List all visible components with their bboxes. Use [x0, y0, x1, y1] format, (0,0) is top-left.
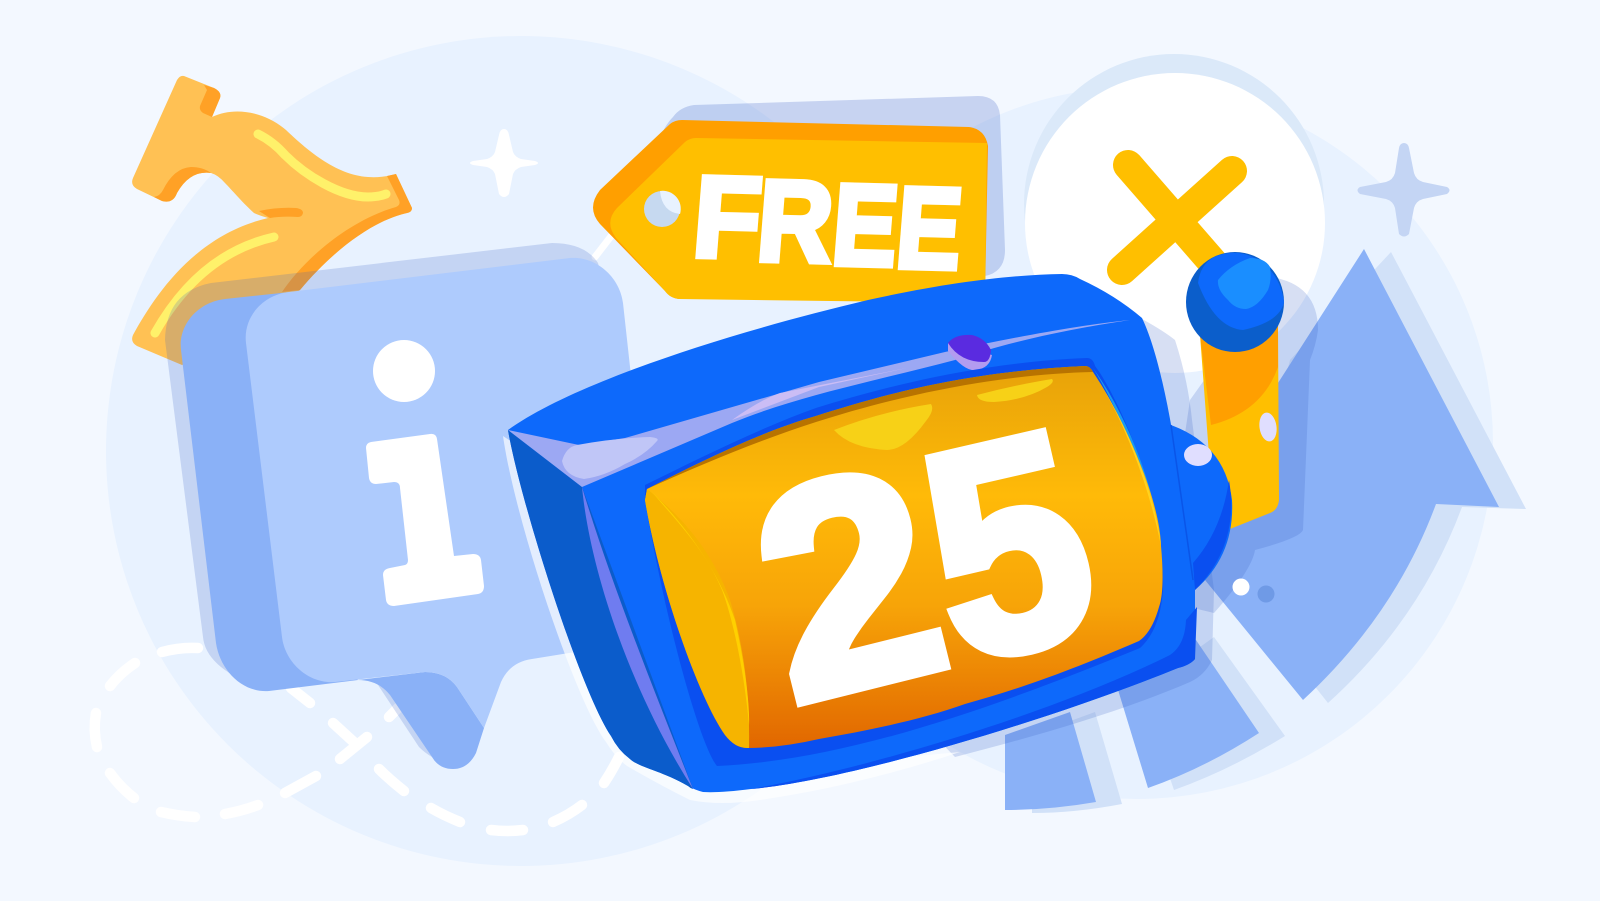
tag text: F — [689, 152, 766, 282]
background circle left — [106, 36, 936, 866]
device glow — [503, 436, 960, 803]
screen left stripe — [652, 492, 749, 725]
white circle shadow — [1024, 54, 1324, 354]
screen right stripe — [1093, 372, 1161, 546]
device shadow — [900, 286, 1214, 757]
bubble tail shadow — [378, 685, 432, 757]
cyan edge — [1093, 368, 1161, 545]
growth arrow — [1005, 249, 1499, 810]
white circle — [1025, 73, 1325, 373]
screen — [645, 366, 1163, 748]
bubble back shadow — [165, 243, 640, 691]
jackpot number — [726, 367, 1121, 766]
purple gem — [948, 343, 992, 370]
bottom dark band — [751, 607, 1197, 789]
price tag — [593, 120, 988, 303]
tag string — [595, 235, 612, 257]
icon: golden horn — [132, 76, 412, 365]
jackpot number: 2 — [726, 402, 972, 766]
slot machine device — [508, 274, 1197, 792]
screen highlight 1 — [834, 404, 932, 450]
icon: yellow cross — [1122, 165, 1235, 288]
screen recess — [645, 358, 1163, 766]
screen top shade — [647, 366, 1093, 489]
device side — [508, 430, 693, 789]
ball — [1165, 423, 1232, 590]
screen left panel — [645, 489, 749, 748]
rod handle — [1200, 325, 1279, 535]
frame edge line — [1171, 425, 1193, 580]
tag text: E — [892, 163, 967, 294]
tag text: R — [753, 157, 838, 287]
arrow shadow — [1032, 252, 1526, 813]
jackpot number: 5 — [895, 367, 1121, 726]
purple crescent — [582, 487, 693, 789]
tag hole — [644, 191, 680, 227]
speech bubble — [165, 243, 660, 769]
tag text — [689, 152, 967, 294]
white dot — [1232, 578, 1250, 596]
tag text: E — [828, 160, 903, 291]
screen highlight 2 — [977, 379, 1053, 402]
device body — [508, 274, 1195, 792]
price tag shadow — [640, 96, 1005, 290]
dashed route — [95, 648, 619, 831]
sparkle white — [470, 129, 538, 197]
background circle right — [781, 87, 1493, 799]
bubble front — [246, 258, 660, 728]
handle shadow — [1160, 276, 1318, 613]
knob — [1186, 252, 1284, 352]
info icon — [366, 340, 484, 606]
reflection blob — [562, 437, 658, 479]
top facet reflection — [508, 320, 1130, 487]
sparkle blue — [1358, 143, 1450, 236]
bubble side — [181, 291, 484, 769]
reflection streak — [732, 368, 907, 420]
blue dot — [1258, 586, 1274, 602]
